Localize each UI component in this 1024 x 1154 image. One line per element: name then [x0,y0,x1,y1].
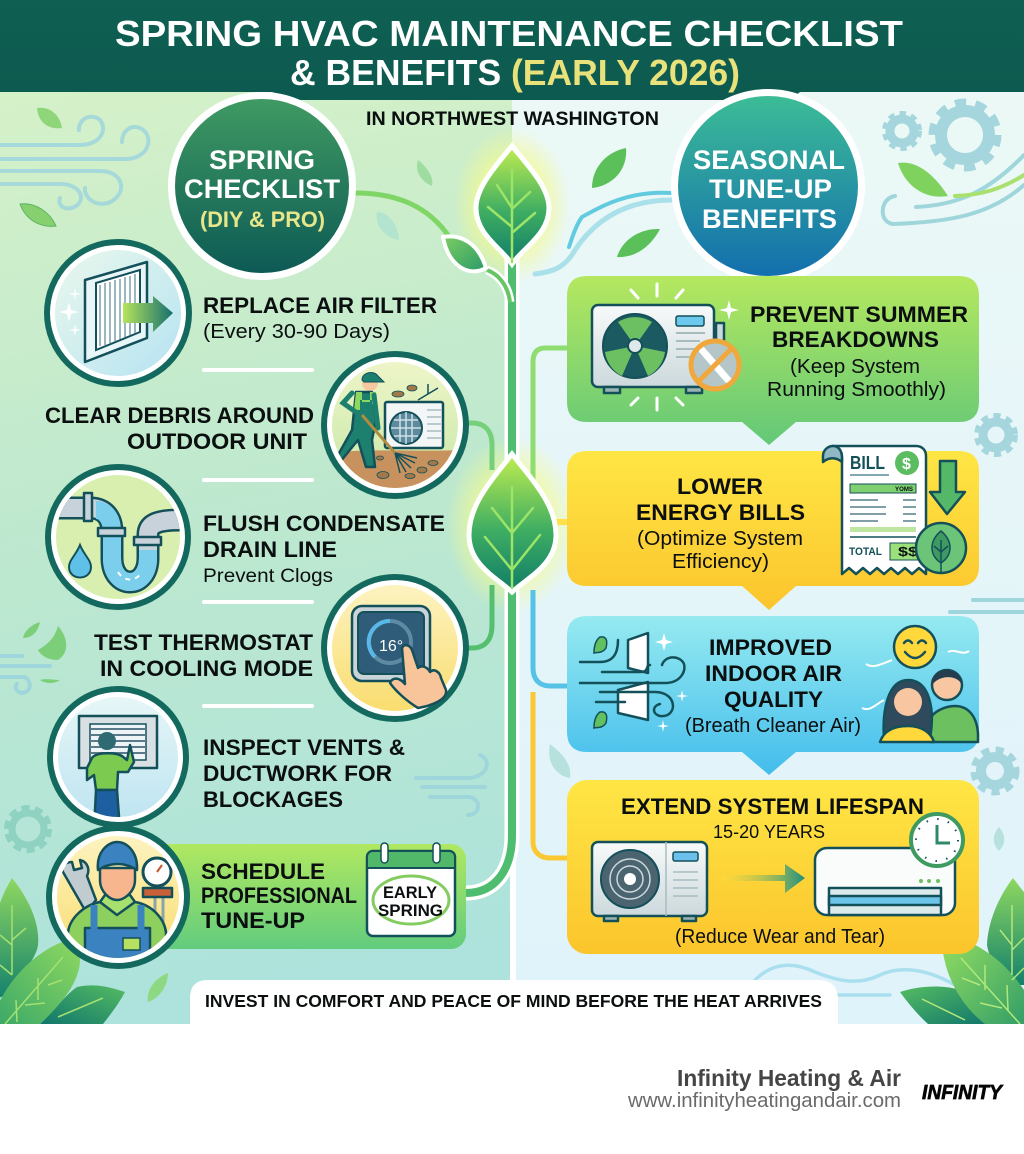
circle: seasonal benefits: TUNE-UP [709,174,832,204]
text: lower energy bills: Efficiency) [672,551,769,573]
footer brand: www.infinityheatingandair.com [627,1090,901,1112]
footer brand: Infinity Heating & Air [677,1065,901,1091]
item 5: inspect vents [47,686,405,830]
bottom left foliage [0,878,125,1024]
text: test thermostat: IN COOLING MODE [100,656,313,681]
text: extend lifespan: (Reduce Wear and Tear) [675,926,885,948]
text: prevent summer breakdowns: Running Smoothly) [767,379,946,401]
wind right top [883,155,1024,224]
text: clear debris [45,403,314,454]
connector branch from checklist circle [355,193,450,238]
arrow [722,864,805,893]
text: improved indoor air quality: QUALITY [724,687,823,712]
circle: seasonal benefits [671,89,865,283]
item 3: flush condensate [45,464,445,610]
text: lower energy bills: LOWER [677,474,763,499]
icon: bill with savings: YOMS [895,487,913,493]
leaves right top [592,148,948,257]
text: schedule tune-up: SCHEDULE [201,859,325,884]
card 2: lower energy bills [567,446,979,610]
text: lower energy bills: (Optimize System [637,528,803,550]
card 4: extend system lifespan [567,780,979,954]
circle: spring checklist: SPRING [209,145,315,175]
icon: technician [46,825,190,970]
item 4: test thermostat [94,574,469,722]
text: inspect vents: DUCTWORK FOR [203,761,392,786]
right connectors [533,348,567,858]
central stem [443,146,556,893]
text: flush condensate: FLUSH CONDENSATE [203,511,445,536]
text: test thermostat [94,630,314,681]
text: inspect vents: INSPECT VENTS & [203,735,405,760]
text: prevent summer breakdowns: (Keep System [790,356,920,378]
gears top right [885,103,997,167]
callout: tagline [190,980,838,1024]
text: improved indoor air quality: INDOOR AIR [705,661,842,686]
gear right [977,416,1015,454]
text: replace air filter: REPLACE AIR FILTER [203,293,437,318]
title: & BENEFITS (EARLY 2026) [290,52,740,93]
text: schedule tune-up [201,859,357,933]
leaf glow [446,127,578,613]
circle: spring checklist [168,92,356,280]
circle: seasonal benefits: SEASONAL [693,145,845,175]
icon: person inspecting vent [47,686,189,830]
text: prevent summer breakdowns [750,302,968,401]
text: inspect vents [203,735,405,812]
connector: debris to stem [466,423,492,470]
icon: thermostat [321,574,469,722]
text: extend lifespan [621,794,924,948]
icon: air vents [580,633,688,732]
text: clear debris: CLEAR DEBRIS AROUND [45,403,314,428]
text: flush condensate [203,511,445,587]
text: lower energy bills [636,474,805,573]
divider lines [202,368,314,708]
wave bottom right [755,965,955,995]
card 1: prevent summer breakdowns [567,276,979,445]
item 6: schedule tune-up panel [46,825,466,970]
text: test thermostat: TEST THERMOSTAT [94,630,314,655]
circle: spring checklist: (DIY & PRO) [200,207,325,232]
text: schedule tune-up: PROFESSIONAL [201,883,357,908]
text: prevent summer breakdowns: PREVENT SUMMER [750,302,968,327]
icon: calendar early spring: EARLY [383,883,438,902]
text: improved indoor air quality: (Breath Cleaner Air) [685,715,861,737]
top leaf [476,146,549,264]
icon: indoor unit with clock [815,814,963,915]
item 1: replace air filter [44,239,437,387]
icon: outdoor unit with no-repair badge [592,284,741,410]
text: extend lifespan: EXTEND SYSTEM LIFESPAN [621,794,924,819]
connector: thermostat to stem [466,585,492,648]
gear left [7,808,49,850]
left mid leaves [23,622,66,683]
text: replace air filter [203,293,437,343]
pale leaves right [549,744,1004,851]
icon: calendar early spring: SPRING [378,901,443,920]
item 2: clear debris [45,351,469,499]
small side leaf [443,236,486,271]
blue wave from benefits circle [535,193,672,274]
left mid decorations [0,656,487,815]
footer brand [0,1024,1024,1154]
title [115,13,903,93]
icon: bill with savings [823,446,966,574]
title: SPRING HVAC MAINTENANCE CHECKLIST [115,13,903,54]
text: prevent summer breakdowns: BREAKDOWNS [772,327,939,352]
icon: worker raking debris [321,351,469,499]
wind right mid [950,600,1024,612]
text: improved indoor air quality [685,635,861,737]
text: replace air filter: (Every 30-90 Days) [203,321,390,343]
text: clear debris: OUTDOOR UNIT [127,429,308,454]
subtitle: IN NORTHWEST WASHINGTON [366,109,659,130]
gear right lower [974,750,1016,792]
text: lower energy bills: ENERGY BILLS [636,500,805,525]
header band [0,0,1024,100]
icon: drain pipe [45,464,191,610]
decorative wind left top [0,117,148,208]
leaf small bottom [148,973,168,1002]
text: flush condensate: Prevent Clogs [203,566,333,587]
centre leaf [469,454,556,592]
text: schedule tune-up: TUNE-UP [201,908,305,933]
callout: tagline: INVEST IN COMFORT AND PEACE OF MIND BEFORE THE HEAT ARRIVES [205,991,822,1011]
icon: bill with savings: TOTAL [849,546,882,558]
icon: smiley and people [862,626,978,742]
text: inspect vents: BLOCKAGES [203,787,343,812]
text: improved indoor air quality: IMPROVED [709,635,832,660]
icon: thermostat: 16° [379,638,403,655]
leaves top left [20,108,432,240]
icon: bill with savings: $$ [898,544,919,559]
text: extend lifespan: 15-20 YEARS [713,822,825,842]
card 3: improved indoor air quality [567,616,979,775]
circle: spring checklist: CHECKLIST [184,174,341,204]
bottom right foliage [900,878,1024,1024]
icon: air filter [44,239,192,387]
circle: seasonal benefits: BENEFITS [702,204,837,234]
icon: bill with savings: BILL [850,453,885,473]
icon: calendar early spring [367,843,455,936]
icon: bill with savings: $ [902,456,911,473]
icon: outdoor unit [592,842,707,921]
text: flush condensate: DRAIN LINE [203,537,337,562]
logo wordmark: INFINITY [922,1082,1004,1104]
